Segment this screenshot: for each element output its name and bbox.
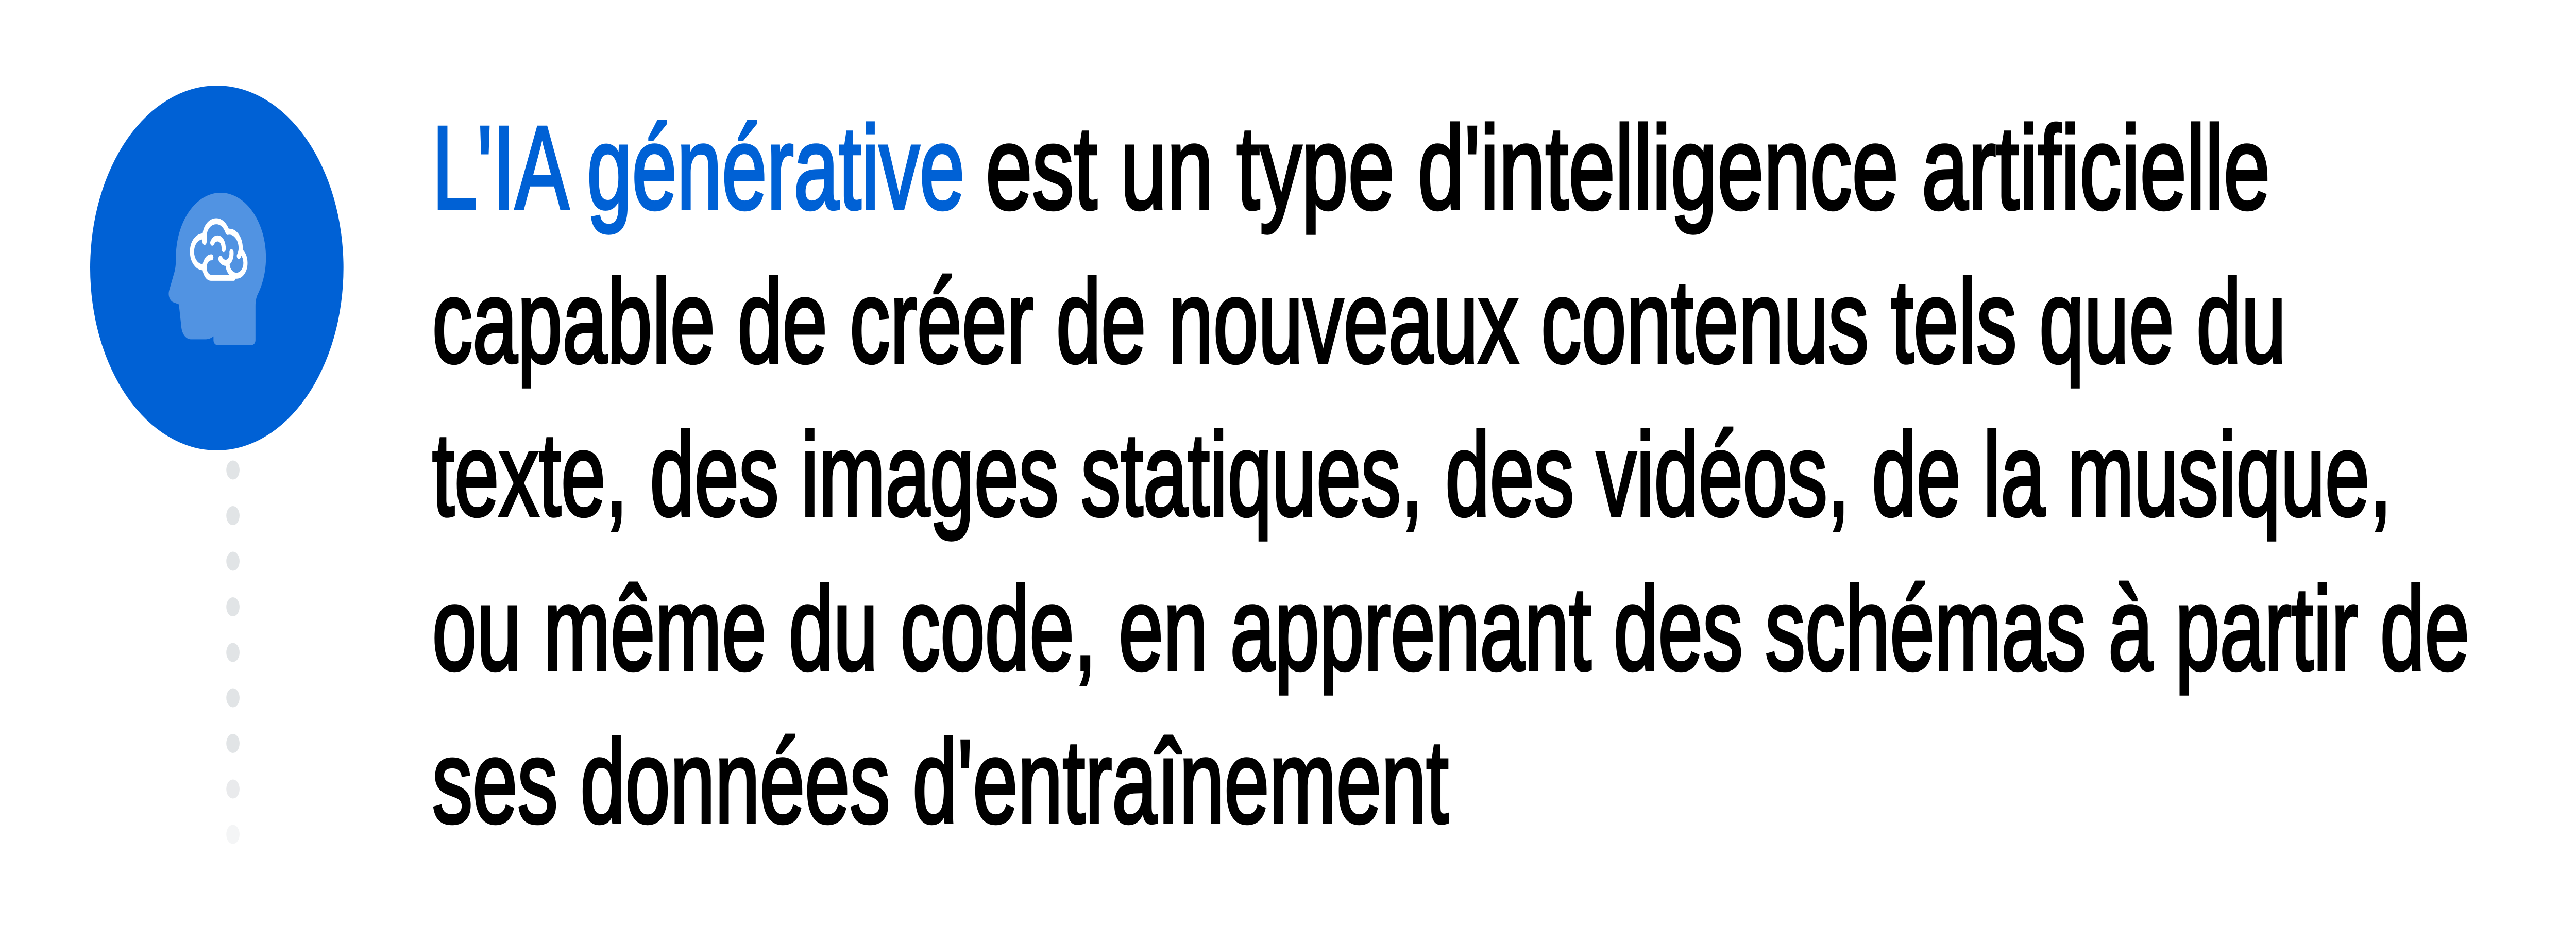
icon: brain outline — [192, 221, 245, 278]
line 3: texte, des images statiques, des vidéos, de la musique, — [432, 408, 2392, 541]
icon: blue circle with head and brain — [90, 86, 344, 450]
line 2: capable de créer de nouveaux contenus tels que du — [432, 255, 2286, 388]
line 4: ou même du code, en apprenant des schémas à partir de — [432, 562, 2469, 695]
highlighted term: L'IA générative — [432, 102, 964, 234]
line 5: ses données d'entraînement — [432, 715, 1449, 848]
blue circle — [90, 86, 344, 450]
dotted vertical connector — [226, 461, 240, 844]
text block: definition — [432, 102, 2469, 848]
icon: head silhouette — [168, 193, 266, 345]
line 1: est un type d'intelligence artificielle — [986, 102, 2270, 234]
